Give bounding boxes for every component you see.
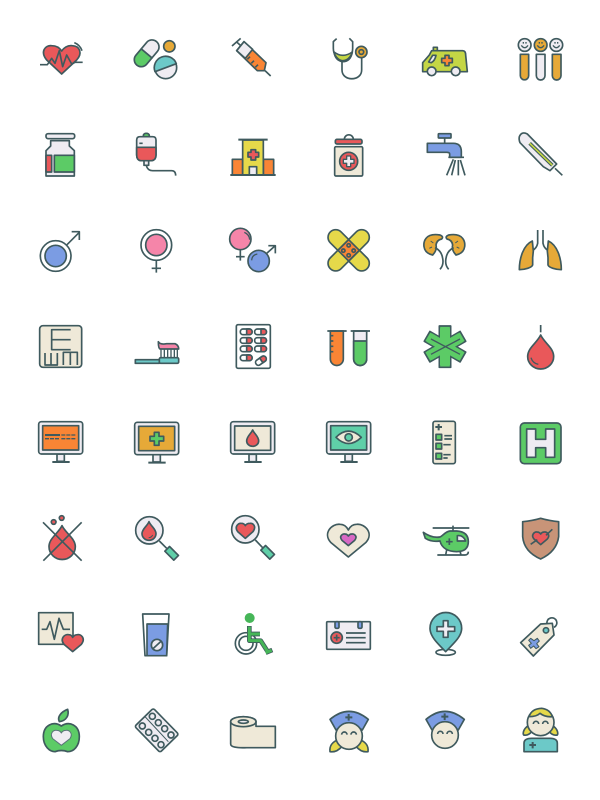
icon: kidneys xyxy=(424,235,465,269)
icon: medical checklist xyxy=(433,421,455,464)
icon: male and female symbols xyxy=(230,228,275,272)
icon: eye test chart xyxy=(40,326,82,367)
icon: monitor with green cross xyxy=(135,422,179,463)
icon: heart in heart xyxy=(328,524,369,557)
icon: glass with tablet xyxy=(143,614,169,656)
icon: helipad H sign xyxy=(520,423,561,464)
icon: nurse xyxy=(426,711,464,748)
icon: IV drip bag xyxy=(137,133,176,176)
icon: apple with heart xyxy=(43,709,79,752)
icon: test tubes with smileys xyxy=(518,39,563,80)
icon: ID card xyxy=(327,622,370,649)
icon: crossed out blood drop xyxy=(43,516,82,561)
icon: hospital xyxy=(230,140,276,175)
icon: shield with heart xyxy=(523,518,559,559)
icon: toothbrush xyxy=(135,342,179,363)
icon: male symbol xyxy=(40,232,79,271)
icon: monitor with orange screen xyxy=(39,422,83,462)
icon: blood drop xyxy=(528,325,554,369)
icon: syringe xyxy=(232,38,271,76)
icon: thermometer xyxy=(519,133,562,175)
icon: pulse chart with heart xyxy=(39,613,83,652)
icon: magnifier with blood drop xyxy=(136,517,179,560)
icon: monitor with eye xyxy=(327,422,371,462)
icon: nurse with pigtails xyxy=(330,711,368,752)
icon: bandage roll xyxy=(231,717,275,748)
icon: medicine bottle xyxy=(335,135,363,176)
icon: pills xyxy=(131,37,177,79)
icon: female symbol xyxy=(141,230,172,273)
icon: stethoscope xyxy=(333,38,367,79)
icon: lungs xyxy=(519,230,561,270)
icon: location pin with cross xyxy=(430,612,462,655)
icon: monitor with blood drop xyxy=(231,422,275,462)
icon: magnifier with heart xyxy=(232,516,274,559)
icon: female doctor xyxy=(523,708,558,752)
icon: medicine jar xyxy=(46,134,75,176)
icon: medical price tag xyxy=(521,618,557,656)
icon: medical helicopter xyxy=(423,526,469,555)
icon: blister pack of capsules xyxy=(236,325,270,368)
icon: chemical test tubes xyxy=(327,331,370,365)
icon: heart with pulse xyxy=(40,43,83,74)
icon: crossed bandage xyxy=(325,227,372,274)
icon: diagonal blister pack xyxy=(135,708,179,752)
icon: wheelchair user xyxy=(235,613,272,654)
icon: star of life xyxy=(424,326,466,367)
icon: water tap xyxy=(427,134,465,175)
icon: ambulance xyxy=(423,47,467,76)
